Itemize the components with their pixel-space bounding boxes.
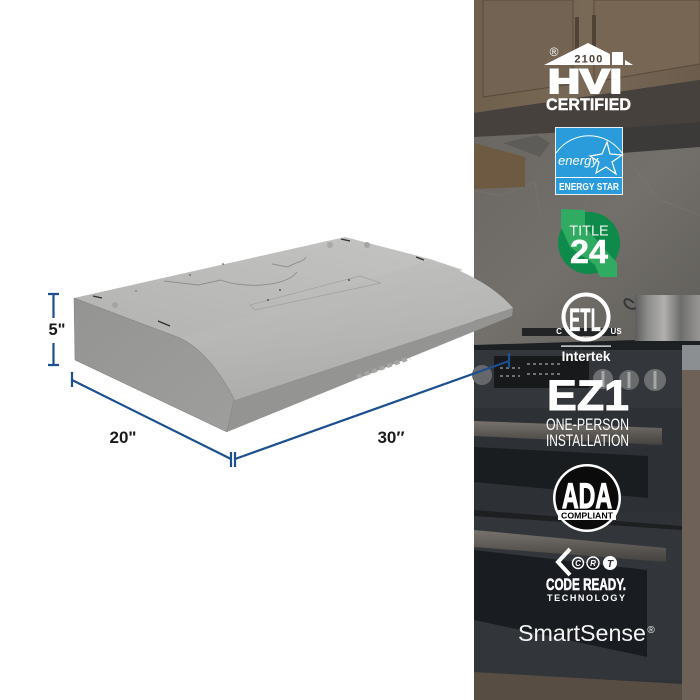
badge: Title 24 — [558, 209, 620, 277]
panel: kitchen lifestyle photo — [472, 0, 700, 700]
dimension: width 30 inches: 30″ — [377, 428, 405, 447]
lower oven door — [474, 510, 682, 680]
badge: Energy Star: energy — [558, 153, 600, 168]
badge: code ready technology: C — [575, 559, 581, 568]
hood top face — [74, 237, 463, 338]
badge: ETL Intertek: ETL — [569, 302, 601, 338]
upper cabinets — [474, 0, 700, 113]
badge: EZ1 one-person installation: INSTALLATION — [546, 432, 629, 450]
badge: Title 24: TITLE — [569, 224, 609, 240]
floor — [474, 672, 682, 700]
pot — [624, 295, 700, 341]
hood lower front band — [227, 308, 513, 432]
top-face cut-outs — [164, 257, 306, 285]
upper oven door — [474, 408, 682, 513]
hood side — [74, 298, 234, 432]
hood curved front — [180, 260, 513, 400]
product: range hood — [74, 237, 513, 432]
badge: Title 24: 24 — [570, 233, 609, 270]
badge: Energy Star: ENERGY STAR — [559, 181, 619, 193]
badge: SmartSense: SmartSense — [518, 620, 646, 646]
small cabinet — [474, 143, 525, 189]
badge: ETL Intertek: C — [556, 327, 562, 336]
badge: HVI certified: 2100 — [574, 54, 604, 66]
badge: code ready technology: TECHNOLOGY — [547, 593, 625, 603]
badge: ETL Intertek: US — [610, 327, 622, 336]
badge: HVI certified — [544, 43, 633, 114]
cabinet beside range — [682, 345, 700, 700]
control buttons — [357, 358, 410, 377]
badge: ETL Intertek — [556, 294, 622, 364]
badge: ADA compliant — [553, 464, 621, 532]
badge: ETL Intertek: LISTED — [579, 335, 593, 340]
dimension: height 5 inches — [48, 294, 66, 365]
badge: ADA compliant: COMPLIANT — [561, 510, 614, 520]
range control panel — [474, 350, 682, 408]
mounting slots — [93, 239, 424, 326]
badge: code ready technology — [546, 549, 626, 603]
badge: Energy Star — [556, 128, 622, 194]
dimension: depth 20 inches: 20" — [110, 428, 136, 447]
badge: ADA compliant: ADA — [562, 477, 612, 516]
dimension: width 30 inches — [235, 353, 509, 467]
badge: EZ1 one-person installation: ONE-PERSON — [546, 416, 629, 434]
badge: ETL Intertek: Intertek — [562, 349, 611, 364]
badge: EZ1 one-person installation — [546, 372, 629, 450]
dimension: depth 20 inches — [72, 372, 231, 467]
badge: HVI certified: HVI — [548, 63, 622, 101]
dimension: height 5 inches: 5" — [48, 321, 66, 339]
badge: code ready technology: CODE READY. — [546, 575, 626, 594]
badge: code ready technology: R — [590, 559, 596, 568]
badge: HVI certified: ® — [550, 45, 559, 59]
range hood band — [474, 80, 700, 137]
badge: code ready technology: T — [607, 559, 614, 570]
badge: SmartSense: ® — [647, 625, 655, 636]
marble backsplash — [474, 130, 700, 345]
badge: EZ1 one-person installation: EZ1 — [547, 372, 629, 420]
badge: HVI certified: CERTIFIED — [546, 96, 631, 114]
cooktop — [474, 338, 700, 352]
